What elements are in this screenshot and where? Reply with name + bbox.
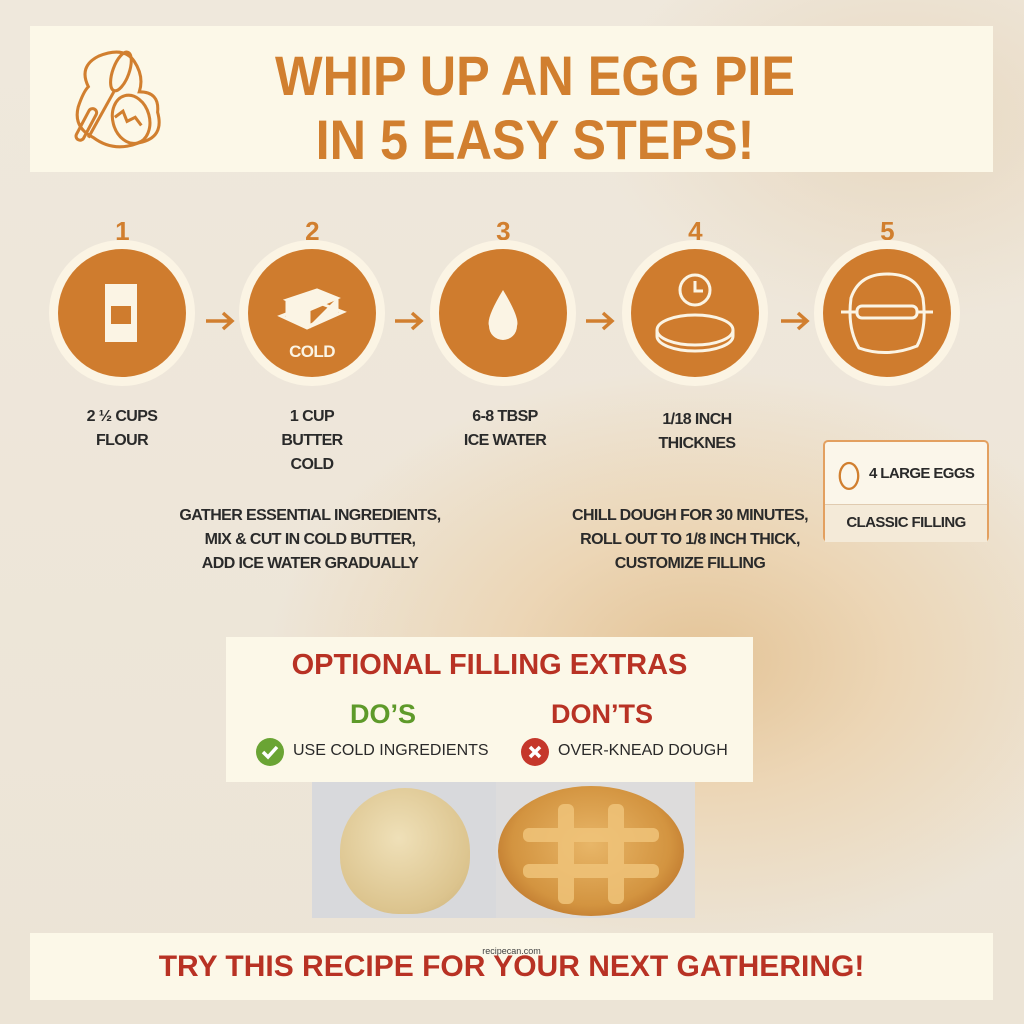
text: 6-8 TBSP <box>472 408 538 425</box>
description left <box>179 507 441 572</box>
arrow 2 <box>395 312 424 330</box>
icon: check <box>256 738 284 766</box>
description right: ROLL OUT TO 1/8 INCH THICK, <box>580 531 800 548</box>
photo: lattice pie <box>496 782 695 918</box>
bottom banner: recipecan.com <box>482 946 541 956</box>
eggs box: 4 LARGE EGGS <box>869 465 974 482</box>
step 5 circle: rolling pin <box>814 240 960 386</box>
text: BUTTER <box>281 432 343 449</box>
panel: optional filling extras: USE COLD INGREDIENTS <box>293 742 489 759</box>
text: 4 <box>688 216 702 246</box>
step labels <box>87 408 158 449</box>
arrow 3 <box>586 312 614 330</box>
step 2 circle: butter: COLD <box>289 342 335 361</box>
eggs box: CLASSIC FILLING <box>846 514 966 531</box>
panel: optional filling extras: DO’S <box>350 699 416 729</box>
icon: whisk and egg <box>74 50 161 148</box>
header panel <box>30 26 993 172</box>
arrow 1 <box>206 312 234 330</box>
text: 1 CUP <box>290 408 334 425</box>
panel: optional filling extras: OVER-KNEAD DOUGH <box>558 742 728 759</box>
bottom banner: TRY THIS RECIPE FOR YOUR NEXT GATHERING! <box>159 950 864 983</box>
title <box>275 44 795 171</box>
description right: CUSTOMIZE FILLING <box>615 555 765 572</box>
description left: GATHER ESSENTIAL INGREDIENTS, <box>179 507 441 524</box>
step 2 circle: butter <box>239 240 385 386</box>
step 4 circle: clock and disc <box>622 240 768 386</box>
icon: cross <box>521 738 549 766</box>
description left: ADD ICE WATER GRADUALLY <box>202 555 418 572</box>
text: 3 <box>496 216 510 246</box>
panel: optional filling extras: DON’TS <box>551 699 653 729</box>
title: IN 5 EASY STEPS! <box>316 108 754 171</box>
icon: egg <box>838 462 860 490</box>
bottom banner <box>30 933 993 1000</box>
panel: optional filling extras: OPTIONAL FILLING EXTRAS <box>292 649 687 681</box>
arrow 4 <box>781 312 810 330</box>
step 1 circle: flour <box>49 240 195 386</box>
text: 2 <box>305 216 319 246</box>
eggs box <box>823 440 989 542</box>
description right: CHILL DOUGH FOR 30 MINUTES, <box>572 507 808 524</box>
text: COLD <box>291 456 333 473</box>
step numbers: 1 <box>115 216 129 246</box>
title: WHIP UP AN EGG PIE <box>275 44 795 107</box>
text: 5 <box>880 216 894 246</box>
panel: optional filling extras <box>226 637 753 782</box>
step labels: FLOUR <box>96 432 148 449</box>
description right <box>572 507 808 572</box>
step 3 circle: water drop <box>430 240 576 386</box>
text: 1/18 INCH <box>662 411 732 428</box>
step labels: 2 ½ CUPS <box>87 408 157 425</box>
text: ICE WATER <box>464 432 546 449</box>
photo: dough ball <box>312 782 497 918</box>
text: THICKNES <box>658 435 735 452</box>
description left: MIX & CUT IN COLD BUTTER, <box>205 531 415 548</box>
